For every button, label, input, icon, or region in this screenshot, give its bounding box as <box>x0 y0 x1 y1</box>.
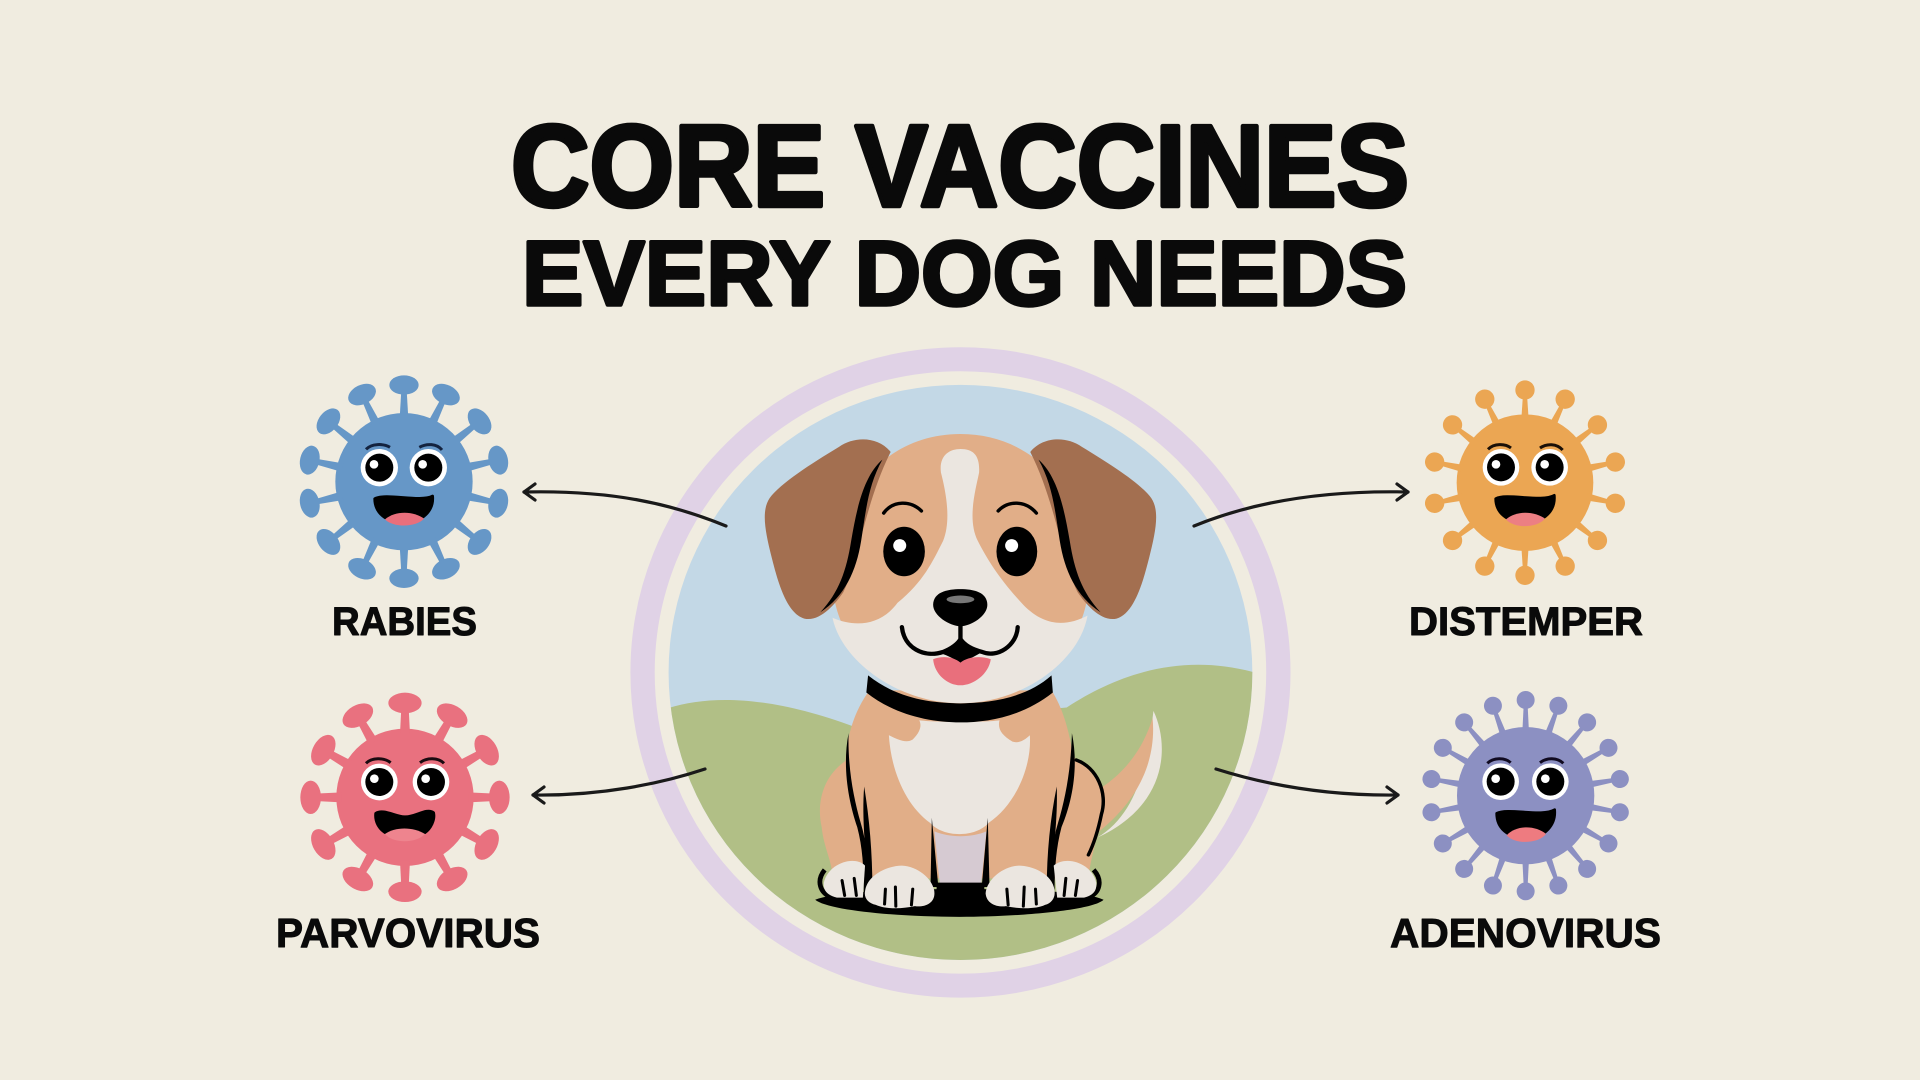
label: parvovirus: PARVOVIRUS <box>276 910 540 956</box>
arrow: to parvovirus <box>533 769 705 803</box>
label: rabies: RABIES <box>332 600 477 644</box>
tail <box>1093 711 1162 838</box>
toe lines <box>842 878 1078 906</box>
left ear <box>765 439 891 619</box>
head <box>833 434 1088 703</box>
haunch line <box>1076 760 1103 855</box>
belly between legs <box>934 831 986 887</box>
arrow: to distemper <box>1194 484 1408 526</box>
ground shadow <box>815 883 1104 917</box>
arrow: to adenovirus <box>1216 769 1398 803</box>
leg and haunch lines <box>846 733 1075 893</box>
label: distemper: DISTEMPER <box>1409 600 1643 644</box>
collar <box>866 675 1053 722</box>
dog <box>765 434 1162 917</box>
icon: rabies virus <box>297 375 511 588</box>
title: CORE VACCINES <box>511 101 1409 231</box>
title: EVERY DOG NEEDS <box>522 223 1407 325</box>
arrow: to rabies <box>524 484 726 526</box>
back paw outlines <box>820 870 1099 898</box>
eyes <box>883 527 1037 576</box>
body <box>820 690 1103 878</box>
icon: adenovirus <box>1421 691 1630 900</box>
chest patch <box>889 720 1030 834</box>
mouth <box>902 624 1018 685</box>
nose <box>933 589 987 626</box>
eyebrows <box>884 503 1036 513</box>
paws <box>824 861 1096 908</box>
face blaze and muzzle <box>833 449 1088 703</box>
central dog illustration <box>643 359 1278 986</box>
outer lavender ring <box>643 359 1278 986</box>
icon: distemper virus <box>1423 380 1627 585</box>
right ear <box>1030 439 1156 619</box>
label: adenovirus: ADENOVIRUS <box>1390 910 1661 956</box>
scene: sky and hills <box>663 378 1258 968</box>
ear lines <box>820 460 1101 612</box>
icon: parvovirus <box>300 693 510 902</box>
title <box>511 101 1409 325</box>
